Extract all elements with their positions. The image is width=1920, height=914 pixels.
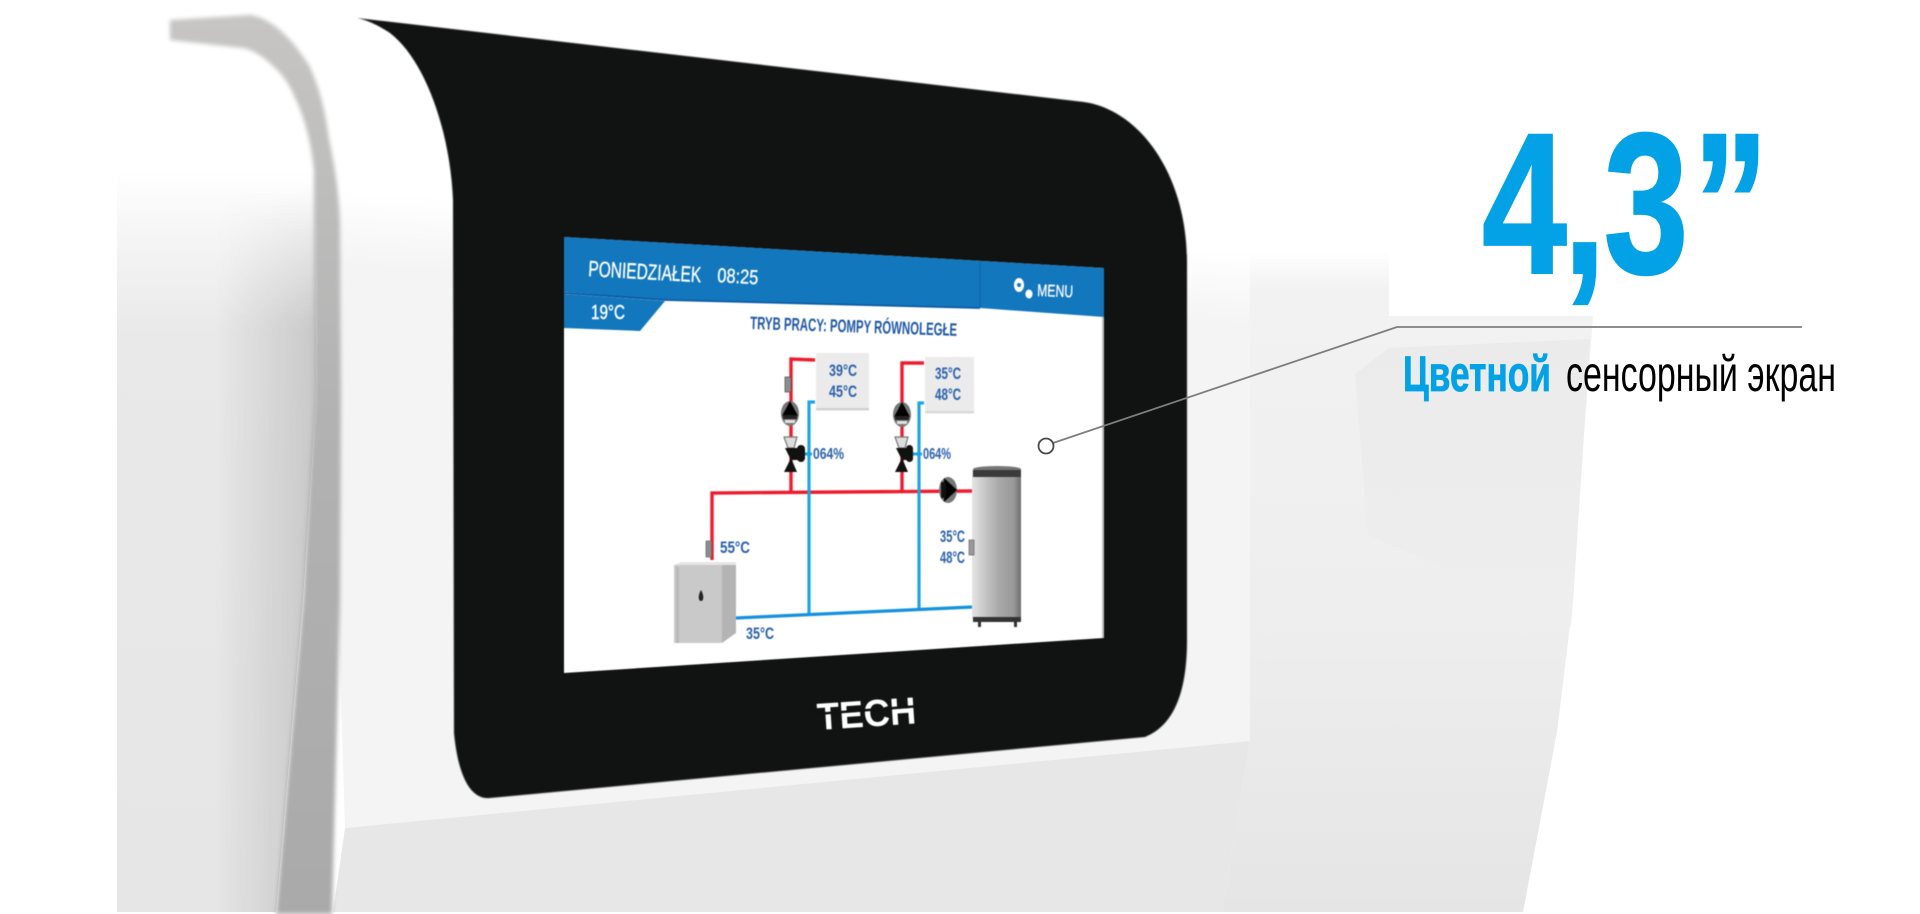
right side wing xyxy=(1222,250,1593,912)
tank temperatures: 35°C xyxy=(940,527,965,546)
boiler temperature: 55°C xyxy=(720,538,750,557)
bezel xyxy=(357,18,1187,798)
left side panel xyxy=(117,170,316,912)
radiator 1: 39°C xyxy=(829,361,857,380)
return pipes xyxy=(736,402,972,618)
screen background xyxy=(564,237,1104,673)
header lower edge xyxy=(564,293,980,308)
gear icon xyxy=(1014,278,1033,298)
screen size headline: 4,3” xyxy=(1482,91,1769,316)
side strip xyxy=(170,15,341,914)
radiator 1: 45°C xyxy=(829,382,857,401)
header time: 08:25 xyxy=(717,265,759,289)
right wing inner facet xyxy=(1355,339,1590,625)
header day label: PONIEDZIAŁEK xyxy=(588,256,702,287)
menu label: MENU xyxy=(1037,281,1074,301)
valve percentage 2: 064% xyxy=(923,446,951,463)
subtitle: Цветной xyxy=(1403,346,1551,402)
boiler sensor xyxy=(706,541,712,557)
buffer pump xyxy=(939,477,957,503)
valve percentage 1: 064% xyxy=(813,446,844,463)
TECH logo: TECH xyxy=(816,691,917,739)
buffer tank xyxy=(972,466,1021,627)
tank sensor xyxy=(969,540,974,555)
mode title: TRYB PRACY: POMPY RÓWNOLEGŁE xyxy=(750,312,957,340)
device body xyxy=(117,15,1593,914)
supply pipes xyxy=(712,359,974,560)
mixing valve 2 xyxy=(895,437,922,472)
temperature tab xyxy=(564,294,665,331)
mixing valve 1 xyxy=(784,437,812,472)
pump 2 xyxy=(893,402,911,427)
front face lower panel xyxy=(333,741,1250,912)
left panel shading xyxy=(240,224,316,912)
callout leader line xyxy=(1038,327,1802,454)
return temperature: 35°C xyxy=(746,624,774,643)
callout marker xyxy=(1038,438,1054,454)
screen right edge shade xyxy=(1102,317,1104,638)
radiator 2 xyxy=(925,357,974,413)
header bar xyxy=(564,237,1104,317)
boiler xyxy=(674,562,736,643)
touch screen xyxy=(564,237,1104,673)
radiator 2: 48°C xyxy=(935,385,961,404)
room temperature: 19°C xyxy=(591,302,625,324)
pump 1 xyxy=(781,401,799,426)
tank temperatures: 48°C xyxy=(940,548,965,567)
radiator 1 xyxy=(816,353,869,410)
menu divider xyxy=(979,262,981,308)
radiator 2: 35°C xyxy=(935,364,961,383)
sensor on circuit 1 xyxy=(785,377,791,392)
front face upper area xyxy=(338,190,1250,828)
tank temperatures xyxy=(940,527,965,567)
